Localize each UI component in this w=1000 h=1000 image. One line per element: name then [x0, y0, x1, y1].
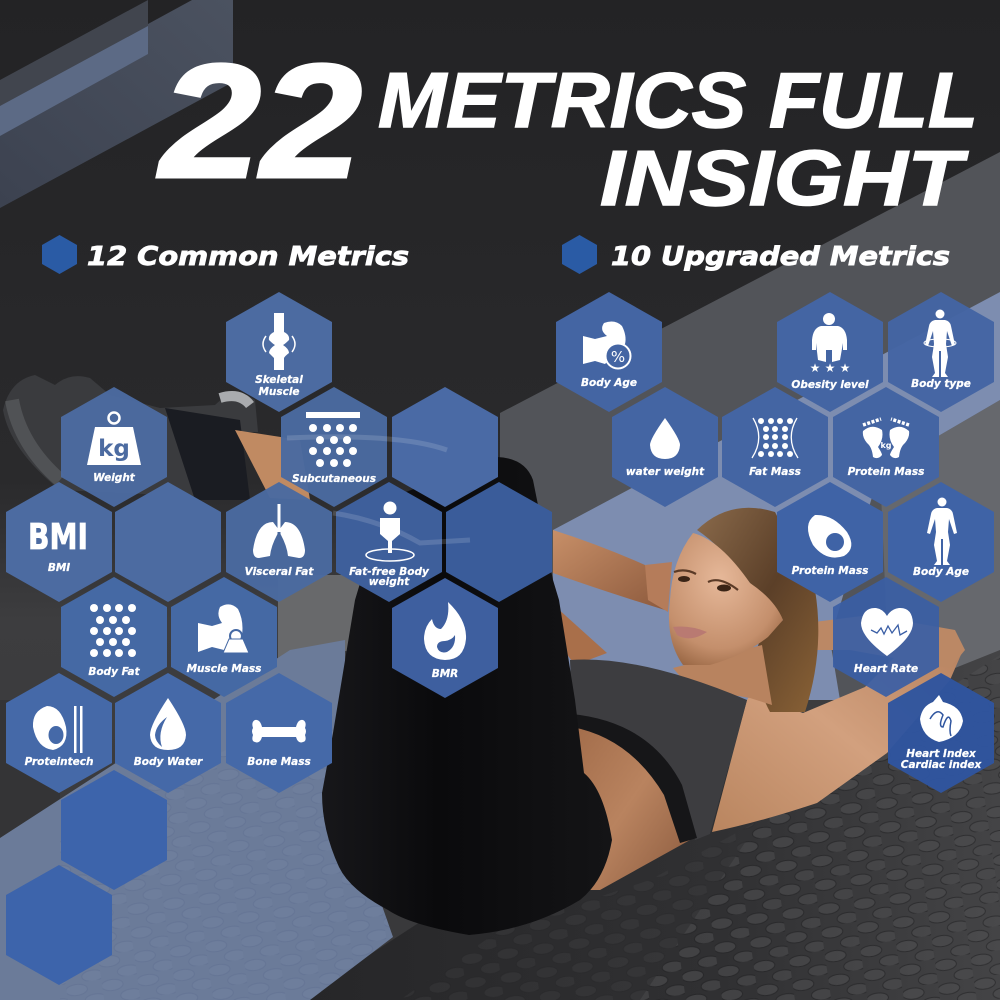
blank hexagon — [392, 387, 498, 507]
body water: Body Water — [134, 756, 203, 768]
forearm — [790, 615, 965, 668]
title — [157, 31, 978, 222]
title line 2: INSIGHT — [600, 134, 969, 222]
skeletal muscle: Skeletal — [255, 374, 303, 386]
body type — [888, 292, 994, 412]
blank hexagon — [115, 482, 221, 602]
body age (muscle) — [556, 292, 662, 412]
BMI — [6, 482, 112, 602]
visceral fat: Visceral Fat — [245, 566, 314, 578]
blank hexagon — [446, 482, 552, 602]
top-left diagonal bands — [0, 0, 233, 208]
right lighter panel — [880, 400, 1000, 700]
proteintech — [6, 673, 112, 793]
obesity level: Obesity level — [791, 379, 869, 391]
right grey panel — [500, 152, 1000, 700]
bra band — [572, 714, 697, 843]
fat-free body weight: weight — [369, 576, 410, 588]
dark mat right — [300, 650, 1000, 1000]
body age (figure): Body Age — [913, 566, 969, 578]
subcutaneous: Subcutaneous — [292, 473, 376, 485]
obesity level: ★ — [825, 361, 835, 375]
panel: common metrics honeycomb — [6, 292, 552, 985]
blank hexagon — [61, 770, 167, 890]
eyes and lips — [673, 570, 738, 638]
fat-free body weight: Fat-free Body — [349, 566, 430, 578]
skeletal muscle: Muscle — [258, 386, 300, 398]
BMR — [392, 578, 498, 698]
sports bra — [570, 660, 747, 840]
neck — [673, 645, 772, 705]
body age (figure) — [888, 482, 994, 602]
body age (muscle): % — [611, 348, 625, 366]
shoes — [3, 375, 258, 500]
body age (muscle): Body Age — [581, 377, 637, 389]
panel: upgraded metrics honeycomb — [556, 292, 994, 793]
visceral fat — [226, 482, 332, 602]
BMI: BMI — [28, 517, 88, 558]
weight: Weight — [93, 472, 136, 484]
bone mass — [226, 673, 332, 793]
heading: 12 common metrics — [42, 235, 409, 274]
shin — [235, 430, 310, 500]
weight: kg — [98, 436, 130, 462]
obesity level — [777, 292, 883, 412]
body water — [115, 673, 221, 793]
heading: 10 upgraded metrics: 10 Upgraded Metrics — [611, 242, 950, 272]
bone mass: Bone Mass — [247, 756, 311, 768]
blue floor band — [0, 640, 393, 1000]
protein mass (feet): Protein Mass — [848, 466, 924, 478]
person: woman doing a crunch — [3, 375, 965, 935]
grey patch left of legs — [278, 575, 370, 665]
belly — [570, 715, 690, 890]
BMI: BMI — [48, 562, 70, 574]
leggings — [322, 457, 612, 935]
BMR: BMR — [432, 668, 458, 680]
heading: 10 upgraded metrics — [562, 235, 950, 274]
weight — [61, 387, 167, 507]
fat mass — [722, 387, 828, 507]
left mat — [0, 700, 60, 845]
protein mass (feet) — [833, 387, 939, 507]
water weight — [612, 387, 718, 507]
muscle mass — [171, 577, 277, 697]
far arm — [553, 530, 665, 610]
obesity level: ★ — [810, 361, 820, 375]
heart index cardiac index: Cardiac index — [901, 759, 982, 771]
face — [669, 533, 783, 665]
protein mass (feet): kg — [880, 441, 892, 450]
heart index cardiac index — [888, 673, 994, 793]
heart index cardiac index: Heart Index — [906, 748, 977, 760]
heart rate — [833, 577, 939, 697]
obesity level: ★ — [840, 361, 850, 375]
blue band behind head — [553, 292, 1000, 700]
title number: 22 — [157, 31, 362, 212]
subcutaneous — [281, 387, 387, 507]
body fat — [61, 577, 167, 697]
heart rate: Heart Rate — [854, 663, 918, 675]
body type: Body type — [911, 378, 971, 390]
hair — [697, 508, 818, 712]
blank hexagon — [6, 865, 112, 985]
fat-free body weight — [336, 482, 442, 602]
heading: 12 common metrics: 12 Common Metrics — [87, 242, 409, 272]
water weight: water weight — [626, 466, 705, 478]
hand behind head — [645, 562, 672, 612]
skeletal muscle — [226, 292, 332, 412]
muscle mass: Muscle Mass — [187, 663, 261, 675]
fat mass: Fat Mass — [749, 466, 801, 478]
protein mass (egg) — [777, 482, 883, 602]
body fat: Body Fat — [88, 666, 141, 678]
proteintech: Proteintech — [25, 756, 93, 768]
protein mass (egg): Protein Mass — [792, 565, 868, 577]
near arm and chest — [712, 630, 963, 832]
light streaks over hexagons — [287, 437, 470, 543]
title line 1: METRICS FULL — [378, 56, 978, 144]
